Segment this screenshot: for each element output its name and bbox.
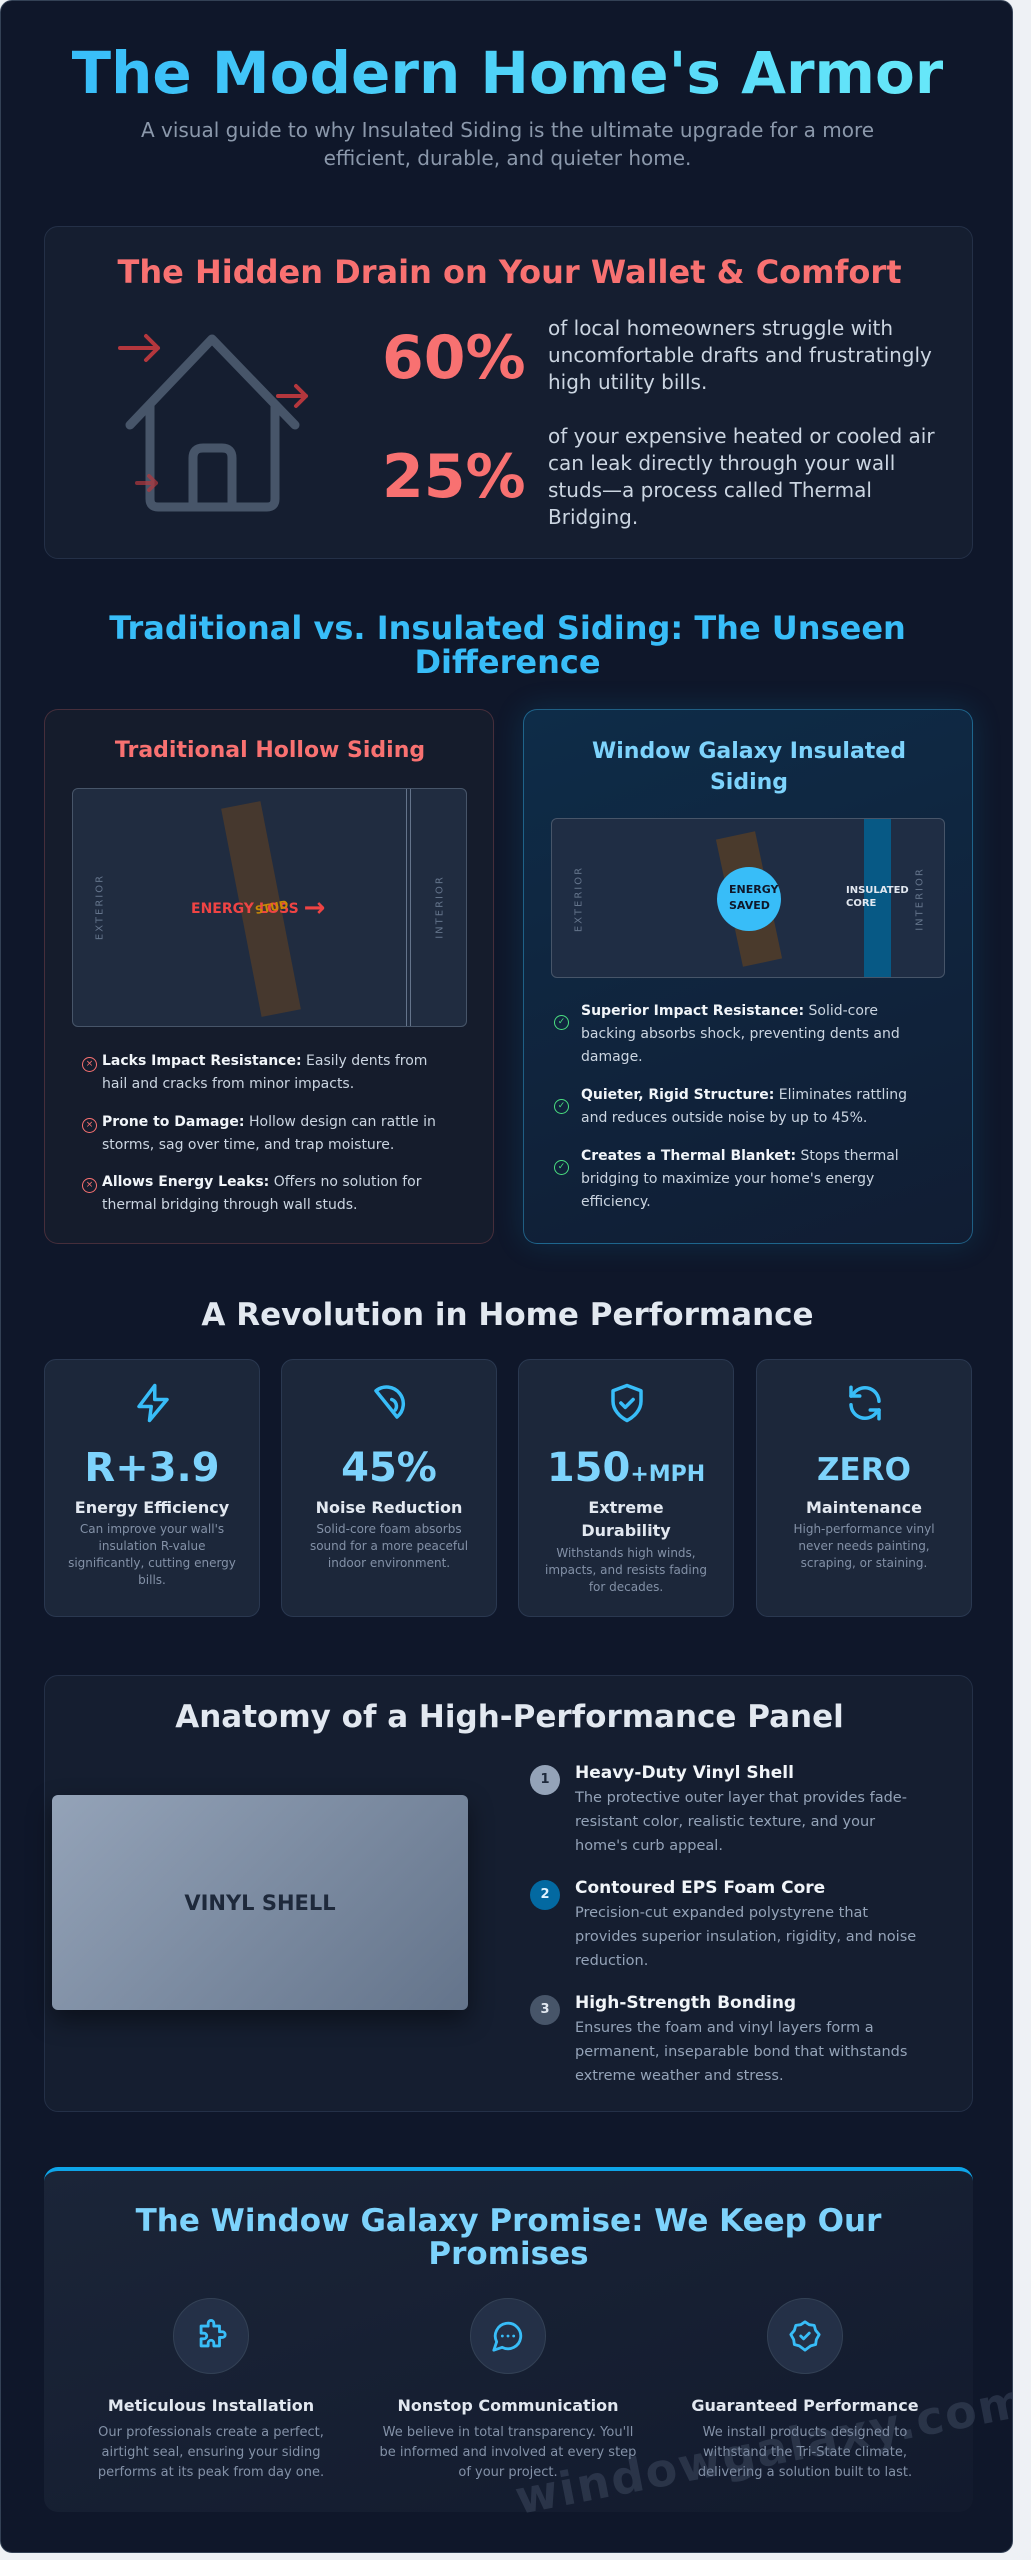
icon: chat <box>470 2298 546 2374</box>
diagram: insulated siding: INSULATED <box>846 885 909 896</box>
card: noise: 45% <box>341 1445 437 1491</box>
panel: insulated siding <box>523 709 973 1244</box>
bullets: traditional: × <box>86 1059 93 1069</box>
diagram: insulated siding: ENERGY <box>729 883 778 896</box>
panel: hidden drain <box>44 226 973 559</box>
card: maintenance: High-performance vinyl <box>793 1522 935 1536</box>
icon: noise shield <box>374 1385 406 1419</box>
bullets: traditional: × <box>86 1180 93 1190</box>
promise: communication: be informed and involved at every step <box>380 2445 636 2460</box>
card: durability: impacts, and resists fading <box>545 1563 707 1577</box>
diagram: insulated siding: INTERIOR <box>914 867 926 931</box>
promise: installation: Meticulous Installation <box>108 2396 314 2415</box>
stat text 60: high utility bills. <box>548 370 707 394</box>
stat text 25 <box>548 424 935 529</box>
item 2: provides superior insulation, rigidity, and noise <box>575 1929 916 1945</box>
promise: performance: withstand the Tri-State climate, <box>703 2445 907 2460</box>
item 3: extreme weather and stress. <box>575 2068 784 2084</box>
icon: refresh <box>849 1386 881 1420</box>
card: noise: sound for a more peaceful <box>310 1539 468 1553</box>
bullets: insulated: Creates a Thermal Blanket: Stops thermal <box>581 1148 899 1164</box>
stat text 25: studs—a process called Thermal <box>548 478 872 502</box>
card: noise <box>281 1359 497 1617</box>
promise: installation: airtight seal, ensuring your siding <box>102 2445 320 2460</box>
promise: communication: We believe in total transparency. You'll <box>383 2425 633 2440</box>
heading: anatomy: Anatomy of a High-Performance Panel <box>175 1699 844 1735</box>
diagram: hollow siding: ENERGY LOSS → <box>191 893 325 923</box>
diagram: hollow siding: INTERIOR <box>434 875 446 939</box>
title: The Modern Home's Armor <box>72 39 943 107</box>
bullets: insulated <box>554 1003 907 1210</box>
heading: hidden drain: The Hidden Drain on Your Wallet & Comfort <box>118 253 901 291</box>
item 2: Contoured EPS Foam Core <box>575 1878 825 1898</box>
bullets: insulated: and reduces outside noise by up to 45%. <box>581 1110 867 1126</box>
bullets: traditional <box>82 1053 436 1213</box>
heading: insulated <box>592 739 906 795</box>
bullets: traditional: storms, sag over time, and trap moisture. <box>102 1137 394 1153</box>
heading: revolution: A Revolution in Home Performance <box>201 1297 814 1333</box>
panel: anatomy <box>44 1675 973 2112</box>
item 2: reduction. <box>575 1953 648 1969</box>
diagram: hollow siding: STUD <box>254 898 289 917</box>
icon: badge check <box>767 2298 843 2374</box>
heading: promise: Promises <box>428 2236 589 2272</box>
bullets: insulated: efficiency. <box>581 1194 651 1210</box>
stat text 25: Bridging. <box>548 505 638 529</box>
card: energy: Can improve your wall's <box>80 1522 224 1536</box>
item 1: home's curb appeal. <box>575 1838 723 1854</box>
card: maintenance: never needs painting, <box>798 1539 930 1553</box>
bullets: insulated: backing absorbs shock, preventing dents and <box>581 1026 900 1042</box>
diagram: insulated siding: CORE <box>846 898 876 909</box>
item 3: Ensures the foam and vinyl layers form a <box>575 2020 874 2036</box>
diagram: insulated siding <box>551 818 945 978</box>
card: noise: indoor environment. <box>328 1556 450 1570</box>
subtitle: A visual guide to why Insulated Siding is the ultimate upgrade for a more <box>141 118 874 142</box>
stat 25%: 25% <box>382 442 526 512</box>
bullets: insulated: Superior Impact Resistance: Solid-core <box>581 1003 878 1019</box>
icon: house with leaking arrows <box>118 334 308 512</box>
heading: comparison: Difference <box>414 643 601 681</box>
subtitle: efficient, durable, and quieter home. <box>324 146 691 170</box>
promise: performance <box>691 2298 919 2480</box>
card: energy: bills. <box>138 1573 166 1587</box>
heading: insulated: Window Galaxy Insulated <box>592 739 906 764</box>
bullets: insulated: ✓ <box>558 1101 565 1111</box>
heading: comparison: Traditional vs. Insulated Siding: The Unseen <box>109 609 906 647</box>
promise: performance: delivering a solution built to last. <box>698 2465 912 2480</box>
card: maintenance: scraping, or staining. <box>801 1556 927 1570</box>
panel: promise <box>44 2167 973 2512</box>
subtitle <box>141 118 874 170</box>
card: maintenance: Maintenance <box>806 1498 922 1517</box>
item 2: 2 <box>540 1887 550 1902</box>
stat text 60: of local homeowners struggle with <box>548 316 893 340</box>
item 1: Heavy-Duty Vinyl Shell <box>575 1763 794 1783</box>
vinyl shell block: VINYL SHELL <box>184 1890 336 1914</box>
icon: shield check <box>611 1384 643 1422</box>
diagram: insulated siding: EXTERIOR <box>574 866 584 932</box>
card: durability: Extreme <box>588 1498 664 1517</box>
stat text 25: can leak directly through your wall <box>548 451 895 475</box>
heading: promise <box>136 2203 882 2272</box>
stat text 60 <box>548 316 932 394</box>
bullets: traditional: hail and cracks from minor impacts. <box>102 1076 354 1092</box>
bullets: insulated: ✓ <box>558 1017 565 1027</box>
card: energy: R+3.9 <box>84 1445 220 1491</box>
promise: installation: Our professionals create a perfect, <box>98 2425 324 2440</box>
item 1: resistant color, realistic texture, and your <box>575 1814 875 1830</box>
diagram: insulated siding: SAVED <box>729 899 770 912</box>
promise: performance: Guaranteed Performance <box>691 2396 919 2415</box>
card: durability: for decades. <box>589 1580 663 1594</box>
promise: installation: performs at its peak from day one. <box>98 2465 324 2480</box>
card: energy <box>44 1359 260 1617</box>
item 1: The protective outer layer that provides fade- <box>575 1790 907 1806</box>
stat text 60: uncomfortable drafts and frustratingly <box>548 343 932 367</box>
item 2 <box>530 1878 916 1969</box>
promise: communication <box>380 2298 636 2480</box>
icon: puzzle <box>173 2298 249 2374</box>
bullets: traditional: Prone to Damage: Hollow design can rattle in <box>102 1114 436 1130</box>
bullets: insulated: ✓ <box>558 1162 565 1172</box>
heading: traditional: Traditional Hollow Siding <box>115 738 425 763</box>
bullets: traditional: Allows Energy Leaks: Offers no solution for <box>102 1174 422 1190</box>
bullets: insulated: Quieter, Rigid Structure: Eliminates rattling <box>581 1087 907 1103</box>
card: noise: Noise Reduction <box>316 1498 462 1517</box>
card: durability: Durability <box>581 1521 671 1540</box>
item 3: permanent, inseparable bond that withstands <box>575 2044 907 2060</box>
card: energy: Energy Efficiency <box>75 1498 229 1517</box>
item 2: Precision-cut expanded polystyrene that <box>575 1905 868 1921</box>
card: durability <box>518 1359 734 1617</box>
card: maintenance <box>756 1359 972 1617</box>
heading: comparison <box>109 609 906 681</box>
card: durability: 150+MPH <box>547 1445 705 1491</box>
diagram: hollow siding: EXTERIOR <box>94 874 106 940</box>
icon: zap <box>137 1384 169 1422</box>
card: energy: significantly, cutting energy <box>68 1556 236 1570</box>
bullets: traditional: thermal bridging through wall studs. <box>102 1197 357 1213</box>
stat 60%: 60% <box>382 323 526 393</box>
bullets: traditional: × <box>86 1120 93 1130</box>
bullets: insulated: bridging to maximize your home's energy <box>581 1171 874 1187</box>
heading: promise: The Window Galaxy Promise: We Keep Our <box>136 2203 881 2239</box>
card: maintenance: ZERO <box>817 1452 911 1488</box>
panel: traditional siding <box>44 709 494 1244</box>
card: durability: Withstands high winds, <box>556 1546 696 1560</box>
promise: performance: We install products designed to <box>703 2425 907 2440</box>
heading: insulated: Siding <box>710 770 788 795</box>
bullets: insulated: damage. <box>581 1049 643 1065</box>
item 3 <box>530 1993 907 2084</box>
card: noise: Solid-core foam absorbs <box>316 1522 462 1536</box>
item 3: 3 <box>540 2002 550 2017</box>
card: energy: insulation R-value <box>99 1539 205 1553</box>
promise: communication: of your project. <box>458 2465 558 2480</box>
item 1 <box>530 1763 907 1854</box>
diagram: hollow siding <box>72 788 467 1027</box>
item 3: High-Strength Bonding <box>575 1993 796 2013</box>
vinyl shell block <box>52 1795 468 2010</box>
promise: installation <box>98 2298 324 2480</box>
item 1: 1 <box>540 1772 550 1787</box>
stat text 25: of your expensive heated or cooled air <box>548 424 935 448</box>
promise: communication: Nonstop Communication <box>397 2396 619 2415</box>
bullets: traditional: Lacks Impact Resistance: Easily dents from <box>102 1053 427 1069</box>
